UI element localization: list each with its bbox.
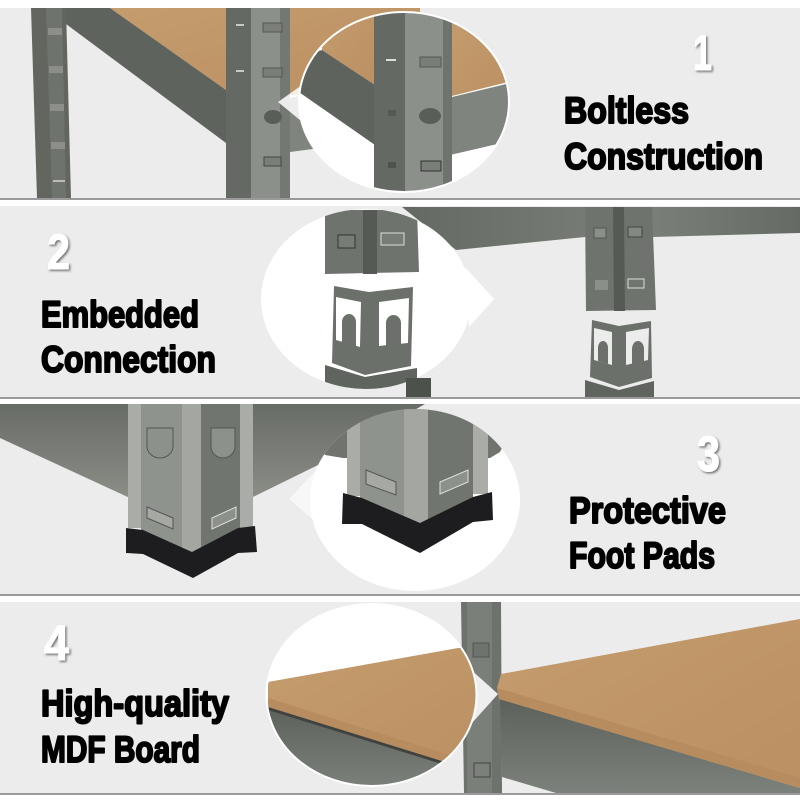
magnifier circle xyxy=(312,409,520,591)
heading: boltless construction: Construction xyxy=(564,136,763,177)
post xyxy=(461,602,502,793)
heading: boltless construction: Boltless xyxy=(564,90,689,131)
board front edge xyxy=(497,688,800,788)
side beam xyxy=(47,8,226,143)
heading: protective foot pads: Foot Pads xyxy=(569,535,715,576)
pointer xyxy=(465,267,494,327)
magnifier circle xyxy=(300,13,508,191)
shelf wood board xyxy=(110,8,420,95)
foot pad xyxy=(126,526,257,578)
number 4: 4 xyxy=(44,615,69,671)
beams xyxy=(0,404,425,498)
heading: high-quality MDF board: MDF Board xyxy=(41,729,200,770)
heading: high-quality MDF board xyxy=(41,683,229,770)
centre upright post xyxy=(226,8,290,198)
panel: protective foot pads xyxy=(0,404,800,596)
pointer xyxy=(278,78,312,130)
left upright post xyxy=(31,8,71,198)
number 1: 1 xyxy=(693,25,712,81)
upper post xyxy=(585,207,656,311)
back beam xyxy=(290,92,320,152)
magnifier circle xyxy=(268,605,476,785)
upper beam xyxy=(402,207,800,250)
heading: protective foot pads: Protective xyxy=(569,490,726,531)
magnifier circle xyxy=(261,209,468,389)
circle outline xyxy=(299,12,509,192)
heading: high-quality MDF board: High-quality xyxy=(41,683,229,724)
pointer xyxy=(289,468,325,530)
pointer xyxy=(469,668,498,723)
circle outline xyxy=(266,604,476,786)
heading: boltless construction xyxy=(564,90,763,177)
post xyxy=(128,404,253,552)
panel: embedded connection xyxy=(0,205,800,399)
wood board xyxy=(497,619,800,788)
number 3: 3 xyxy=(697,426,720,482)
heading: embedded connection: Embedded xyxy=(41,294,199,335)
heading: protective foot pads xyxy=(569,490,726,576)
panel: boltless construction xyxy=(0,8,800,200)
heading: embedded connection: Connection xyxy=(41,339,216,380)
lower post with cutouts xyxy=(585,320,654,397)
panel: high-quality MDF board xyxy=(0,600,800,795)
heading: embedded connection xyxy=(41,294,216,380)
number 2: 2 xyxy=(47,224,70,280)
beam xyxy=(500,699,800,793)
stub post xyxy=(406,378,431,397)
